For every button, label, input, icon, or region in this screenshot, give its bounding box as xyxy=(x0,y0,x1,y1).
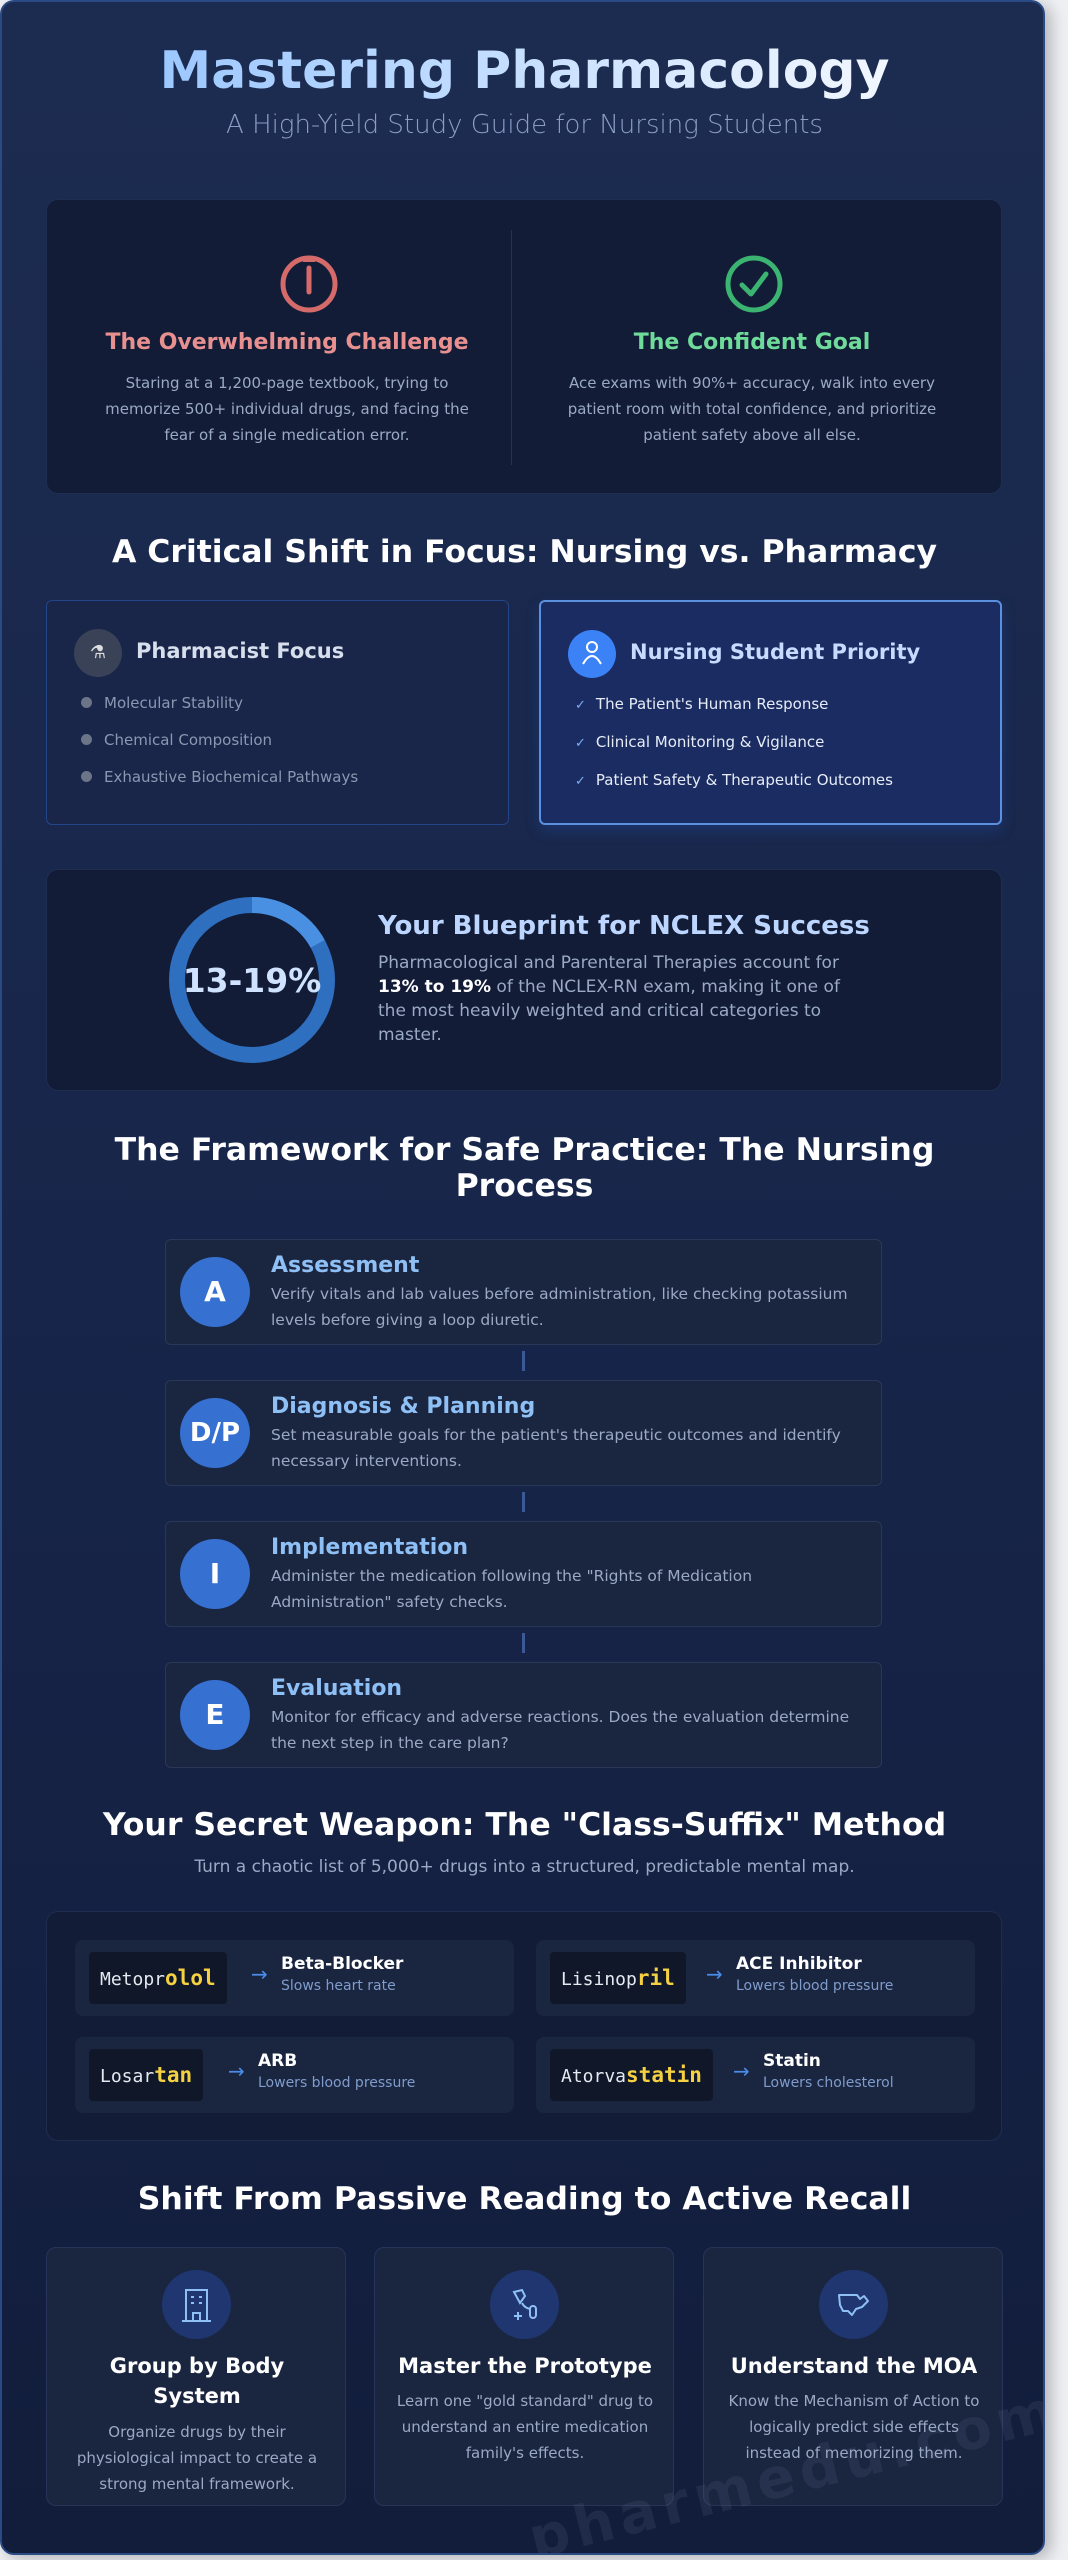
card: prototype: Master the Prototype xyxy=(398,2354,652,2378)
icon: stethoscope xyxy=(490,2270,559,2339)
step: assessment: Verify vitals and lab values before administration, like checking potassium levels before giving a loop diuretic. xyxy=(271,1285,848,1329)
item: statin: Atorvastatin xyxy=(561,2063,702,2087)
item: olol: Beta-Blocker xyxy=(281,1954,403,1974)
item: tan: ARB xyxy=(258,2051,297,2071)
text: goal: Ace exams with 90%+ accuracy, walk into every patient room with total confidence, and prioritize patient safety above all else. xyxy=(568,374,936,444)
list: nursing: ✓ Clinical Monitoring & Vigilance xyxy=(575,733,824,751)
step: diagnosis & planning xyxy=(165,1380,882,1486)
step: evaluation: Evaluation xyxy=(271,1676,402,1701)
card: prototype xyxy=(374,2247,674,2506)
item: tan: Losartan xyxy=(100,2063,192,2087)
heading: class-suffix: Your Secret Weapon: The "Class-Suffix" Method xyxy=(103,1807,946,1843)
heading: blueprint: Your Blueprint for NCLEX Success xyxy=(378,911,870,941)
panel: NCLEX blueprint xyxy=(46,869,1002,1091)
panel: nursing priority: Nursing Student Priority xyxy=(630,640,920,664)
step: implementation: I xyxy=(210,1557,220,1590)
icon: person xyxy=(568,630,616,678)
item: pril: → xyxy=(706,1962,723,1986)
list: pharmacist xyxy=(81,694,358,786)
item: statin: Statin xyxy=(763,2051,821,2071)
item: pril: Lisinopril xyxy=(561,1966,675,1990)
list: pharmacist: Exhaustive Biochemical Pathways xyxy=(104,768,358,786)
heading: critical shift: A Critical Shift in Focus: Nursing vs. Pharmacy xyxy=(112,534,937,570)
card: MOA: Know the Mechanism of Action to logically predict side effects instead of memorizing them. xyxy=(729,2392,979,2462)
step: diagnosis & planning: Diagnosis & Planning xyxy=(271,1394,535,1419)
item: pril xyxy=(536,1940,975,2016)
item: pril: Lowers blood pressure xyxy=(736,1978,893,1994)
step: assessment: A xyxy=(204,1275,226,1308)
heading: goal: The Confident Goal xyxy=(634,330,870,355)
chart: donut 13-19% xyxy=(169,897,335,1063)
step: diagnosis & planning: D/P xyxy=(190,1418,240,1448)
list: nursing: ✓ Patient Safety & Therapeutic Outcomes xyxy=(575,771,893,789)
item: statin xyxy=(536,2037,975,2113)
icon: stopwatch xyxy=(280,256,338,312)
step: implementation: Administer the medication following the "Rights of Medication Administration" safety checks. xyxy=(271,1567,752,1611)
title: Mastering Pharmacology xyxy=(159,41,890,101)
step: assessment xyxy=(165,1239,882,1345)
panel: challenge vs goal xyxy=(46,199,1002,494)
icon: check circle xyxy=(726,256,782,312)
step: evaluation: Monitor for efficacy and adverse reactions. Does the evaluation determine the next step in the care plan? xyxy=(271,1708,849,1752)
icon: building xyxy=(162,2270,231,2339)
item: statin: Lowers cholesterol xyxy=(763,2075,894,2091)
list: nursing xyxy=(575,695,893,789)
step: assessment: Assessment xyxy=(271,1253,419,1278)
heading: active recall: Shift From Passive Reading to Active Recall xyxy=(138,2181,911,2217)
item: statin: → xyxy=(733,2059,750,2083)
panel: pharmacist focus: Pharmacist Focus xyxy=(136,639,344,663)
panel: pharmacist focus xyxy=(46,600,509,825)
step: evaluation xyxy=(165,1662,882,1768)
card: body system: Group by Body System xyxy=(110,2354,284,2408)
step: implementation: Implementation xyxy=(271,1535,468,1560)
icon: pills: ⚗ xyxy=(90,642,106,663)
panel: nursing priority xyxy=(539,600,1002,825)
card: body system: Organize drugs by their physiological impact to create a strong mental framework. xyxy=(77,2423,317,2493)
item: tan xyxy=(75,2037,514,2113)
step: diagnosis & planning: Set measurable goals for the patient's therapeutic outcomes and identify necessary interventions. xyxy=(271,1426,841,1470)
card: MOA xyxy=(703,2247,1003,2506)
item: olol: Metoprolol xyxy=(100,1966,216,1990)
heading: challenge: The Overwhelming Challenge xyxy=(105,330,469,355)
panel: suffix grid xyxy=(46,1911,1002,2141)
card: MOA: Understand the MOA xyxy=(731,2354,977,2378)
item: olol: Slows heart rate xyxy=(281,1978,396,1994)
list: pharmacist: Chemical Composition xyxy=(104,731,272,749)
subtitle: class-suffix: Turn a chaotic list of 5,000+ drugs into a structured, predictable mental map. xyxy=(194,1857,855,1877)
list: pharmacist: Molecular Stability xyxy=(104,694,243,712)
subtitle: A High-Yield Study Guide for Nursing Students xyxy=(226,110,823,140)
step: evaluation: E xyxy=(205,1698,225,1731)
item: olol xyxy=(75,1940,514,2016)
chart: donut 13-19%: 13-19% xyxy=(183,961,321,1000)
step: implementation xyxy=(165,1521,882,1627)
icon: pills xyxy=(74,629,122,677)
card: body system xyxy=(46,2247,346,2506)
heading: nursing process: The Framework for Safe Practice: The Nursing Process xyxy=(115,1132,934,1204)
item: olol: → xyxy=(251,1962,268,1986)
item: tan: → xyxy=(228,2059,245,2083)
text: blueprint: Pharmacological and Parenteral Therapies account for 13% to 19% of the NCLEX-RN exam, making it one of the most heavily weighted and critical categories to master. xyxy=(378,953,840,1045)
item: pril: ACE Inhibitor xyxy=(736,1954,862,1974)
item: tan: Lowers blood pressure xyxy=(258,2075,415,2091)
card: prototype: Learn one "gold standard" drug to understand an entire medication family's effects. xyxy=(397,2392,653,2462)
list: nursing: ✓ The Patient's Human Response xyxy=(575,695,828,713)
text: challenge: Staring at a 1,200-page textbook, trying to memorize 500+ individual drugs, and facing the fear of a single medication error. xyxy=(105,374,469,444)
icon: map xyxy=(819,2270,888,2339)
